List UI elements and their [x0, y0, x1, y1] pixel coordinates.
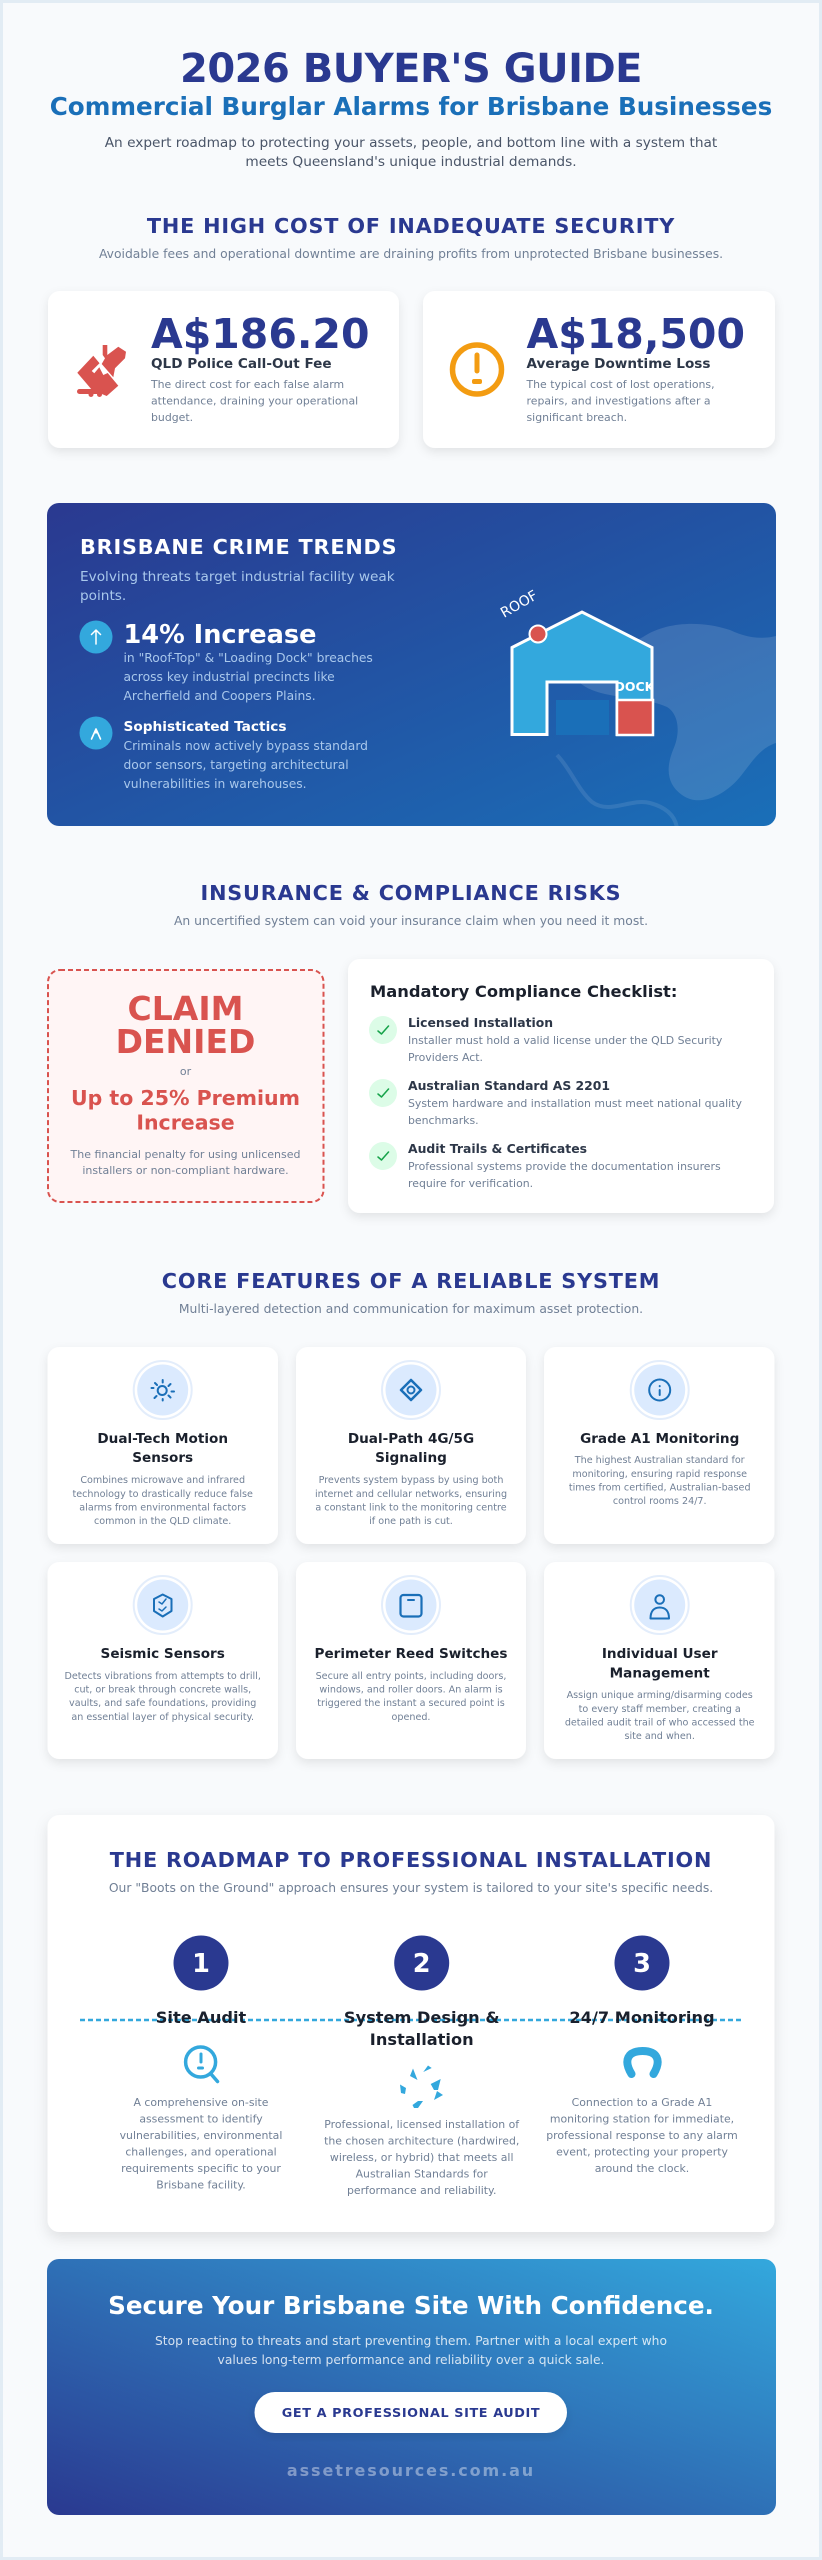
checklist item 1: Providers Act.: [408, 1051, 483, 1064]
feature card: reed switches: windows, and roller doors. An alarm is: [319, 1684, 503, 1696]
checklist item 2: Australian Standard AS 2201: [408, 1078, 610, 1093]
feature card: dual path: [296, 1347, 526, 1544]
feature card: user management: detailed audit trail of who accessed the: [565, 1718, 755, 1728]
roadmap heading: THE ROADMAP TO PROFESSIONAL INSTALLATION: [110, 1848, 712, 1872]
step 2: Australian Standards for: [356, 2168, 488, 2180]
feature card: user management: to every staff member, creating a: [579, 1704, 741, 1715]
icon: tactics: [80, 716, 112, 750]
stat: A$186.20: [151, 310, 369, 358]
section heading: insurance: An uncertified system can void your insurance claim when you need it most.: [174, 914, 648, 928]
section heading: insurance: [174, 881, 648, 928]
section heading: high cost: [99, 214, 723, 261]
header: [50, 46, 772, 170]
panel: claim denied: installers or non-compliant hardware.: [82, 1164, 289, 1177]
step 3: 3: [633, 1949, 651, 1979]
checklist item 1: Licensed Installation: [408, 1015, 553, 1030]
step 3: event, protecting your property: [556, 2146, 728, 2158]
panel: police fee: attendance, draining your operational: [151, 394, 358, 408]
feature card: reed switches: triggered the instant a secured point is: [317, 1698, 505, 1709]
step 1: Brisbane facility.: [156, 2178, 246, 2192]
step 3: [546, 1936, 738, 2175]
roadmap heading: [109, 1848, 713, 1895]
section heading: high cost: THE HIGH COST OF INADEQUATE SECURITY: [147, 214, 675, 238]
feature card: motion sensors: technology to drastically reduce false: [72, 1489, 253, 1500]
panel: claim denied: CLAIM: [128, 989, 243, 1028]
feature card: grade A1: times from certified, Australian-based: [569, 1482, 751, 1494]
step 1: assessment to identify: [139, 2112, 263, 2126]
icon: police alarm: [77, 345, 126, 397]
intro text: meets Queensland's unique industrial demands.: [245, 154, 577, 170]
checklist item 2: [369, 1078, 742, 1127]
feature card: grade A1: The highest Australian standard for: [574, 1455, 745, 1466]
step 2: Installation: [370, 2030, 474, 2049]
panel: compliance checklist: Mandatory Compliance Checklist:: [370, 982, 677, 1001]
checklist item 2: benchmarks.: [408, 1114, 479, 1127]
roadmap heading: Our "Boots on the Ground" approach ensures your system is tailored to your site's specific needs.: [109, 1881, 713, 1895]
feature card: seismic: Detects vibrations from attempts to drill,: [64, 1671, 261, 1682]
icon: sun sensor: [134, 1361, 192, 1419]
panel: Brisbane crime trends: Evolving threats target industrial facility weak: [80, 569, 395, 585]
panel: downtime loss: repairs, and investigations after a: [526, 394, 711, 408]
feature card: motion sensors: common in the QLD climate.: [94, 1516, 231, 1527]
panel: Brisbane crime trends: [47, 503, 776, 828]
subtitle: Commercial Burglar Alarms for Brisbane Businesses: [50, 92, 772, 121]
text: sophisticated tactics: vulnerabilities in warehouses.: [124, 777, 307, 791]
feature card: dual path: Signaling: [375, 1450, 447, 1466]
stat: 14% increase: in "Roof-Top" & "Loading Dock" breaches: [124, 651, 373, 665]
panel: police fee: budget.: [151, 411, 193, 424]
feature card: seismic: vaults, and safe foundations, providing: [69, 1698, 256, 1709]
panel: compliance checklist: [348, 959, 774, 1213]
button: GET A PROFESSIONAL SITE AUDIT: [282, 2406, 540, 2421]
icon: info: [631, 1361, 689, 1419]
step 2: the chosen architecture (hardwired,: [324, 2134, 519, 2148]
checklist item 3: Audit Trails & Certificates: [408, 1141, 587, 1156]
step 2: Professional, licensed installation of: [324, 2118, 520, 2131]
stat: 14% increase: Archerfield and Coopers Plains.: [124, 689, 316, 703]
step 1: challenges, and operational: [125, 2146, 277, 2158]
checklist item 2: System hardware and installation must meet national quality: [408, 1097, 742, 1110]
step 2: wireless, or hybrid) that meets all: [330, 2151, 513, 2164]
checklist item 3: require for verification.: [408, 1177, 533, 1190]
step 2: performance and reliability.: [347, 2184, 496, 2197]
panel: downtime loss: [423, 291, 775, 448]
feature card: dual path: Dual-Path 4G/5G: [348, 1431, 474, 1447]
feature card: motion sensors: [48, 1347, 278, 1544]
feature card: dual path: Prevents system bypass by using both: [319, 1475, 503, 1486]
feature card: reed switches: opened.: [392, 1712, 430, 1723]
feature card: reed switches: Perimeter Reed Switches: [314, 1646, 508, 1662]
step 1: vulnerabilities, environmental: [120, 2129, 282, 2142]
feature card: motion sensors: Dual-Tech Motion: [97, 1431, 228, 1447]
step 2: 2: [413, 1949, 431, 1979]
text: sophisticated tactics: Criminals now actively bypass standard: [124, 739, 368, 753]
button: [254, 2392, 567, 2433]
icon: door panel: [382, 1576, 440, 1634]
step 1: Site Audit: [156, 2008, 246, 2027]
feature card: seismic: Seismic Sensors: [101, 1646, 225, 1662]
text: sophisticated tactics: door sensors, targeting architectural: [124, 758, 349, 772]
text: sophisticated tactics: Sophisticated Tactics: [124, 719, 287, 735]
section heading: core features: [162, 1269, 660, 1316]
step 2: [324, 1936, 520, 2197]
icon: fragmented gear: [400, 2066, 443, 2108]
feature card: user management: Individual User: [602, 1646, 718, 1662]
panel: claim denied: or: [180, 1065, 192, 1078]
icon: warning circle: [452, 345, 502, 394]
panel: claim denied: [48, 970, 324, 1202]
panel: Brisbane crime trends: points.: [80, 588, 126, 604]
icon: diamond: [382, 1361, 440, 1419]
stat: 14% increase: [124, 620, 373, 703]
section heading: core features: CORE FEATURES OF A RELIABLE SYSTEM: [162, 1269, 660, 1293]
section heading: core features: Multi-layered detection and communication for maximum asset protection.: [179, 1302, 643, 1316]
feature card: dual path: a constant link to the monitoring centre: [315, 1502, 507, 1514]
feature card: motion sensors: Sensors: [132, 1450, 193, 1466]
panel: downtime loss: Average Downtime Loss: [526, 356, 710, 372]
feature card: reed switches: [296, 1562, 526, 1759]
step 3: 24/7 Monitoring: [569, 2008, 715, 2027]
step 2: System Design &: [344, 2008, 499, 2027]
feature card: motion sensors: Combines microwave and infrared: [80, 1475, 245, 1486]
intro text: [105, 135, 718, 170]
feature card: grade A1: monitoring, ensuring rapid response: [572, 1469, 747, 1480]
panel: downtime loss: The typical cost of lost operations,: [526, 378, 715, 391]
warehouse diagram: [498, 588, 656, 735]
feature card: user management: [544, 1562, 774, 1759]
dashed connector: [80, 2019, 742, 2021]
intro text: An expert roadmap to protecting your assets, people, and bottom line with a system that: [105, 135, 718, 151]
step 1: [120, 1936, 282, 2192]
icon: hex shield: [134, 1576, 192, 1634]
feature card: grade A1: [544, 1347, 774, 1544]
stat: A$18,500: [526, 310, 745, 358]
feature card: seismic: [48, 1562, 278, 1759]
checklist item 1: Installer must hold a valid license under the QLD Security: [408, 1034, 723, 1047]
feature card: user management: site and when.: [624, 1731, 695, 1742]
feature card: user management: Assign unique arming/disarming codes: [567, 1690, 753, 1701]
decorative map: [557, 624, 776, 828]
panel: police fee: QLD Police Call-Out Fee: [151, 356, 332, 372]
icon: user: [631, 1576, 689, 1634]
feature card: reed switches: Secure all entry points, including doors,: [316, 1671, 506, 1682]
panel: roadmap: [48, 1815, 774, 2232]
checklist item 3: Professional systems provide the documentation insurers: [408, 1160, 721, 1173]
website: assetresources.com.au: [287, 2461, 535, 2480]
panel: police fee: [48, 291, 399, 448]
panel: claim denied: Up to 25% Premium: [71, 1086, 300, 1110]
panel: claim denied: Increase: [136, 1110, 235, 1134]
feature card: seismic: an essential layer of physical security.: [71, 1712, 254, 1723]
panel: police fee: The direct cost for each false alarm: [150, 378, 344, 391]
step 1: 1: [192, 1949, 210, 1979]
feature card: motion sensors: alarms from environmental factors: [79, 1502, 246, 1514]
icon: up arrow: [80, 620, 112, 654]
section heading: insurance: INSURANCE & COMPLIANCE RISKS: [201, 881, 621, 905]
panel: call to action: Stop reacting to threats and start preventing them. Partner with a local expert who: [155, 2334, 667, 2348]
feature card: dual path: internet and cellular networks, ensuring: [315, 1489, 507, 1500]
feature card: grade A1: control rooms 24/7.: [613, 1496, 707, 1507]
panel: claim denied: DENIED: [116, 1022, 255, 1061]
panel: call to action: [47, 2259, 776, 2515]
icon: headset arch: [627, 2051, 658, 2074]
panel: claim denied: The financial penalty for using unlicensed: [70, 1148, 300, 1161]
section heading: high cost: Avoidable fees and operational downtime are draining profits from unprotected Brisbane businesses.: [99, 247, 723, 261]
step 3: Connection to a Grade A1: [572, 2096, 712, 2109]
panel: call to action: values long-term performance and reliability over a quick sale.: [218, 2353, 604, 2367]
feature card: dual path: if one path is cut.: [369, 1516, 453, 1527]
panel: downtime loss: significant breach.: [526, 411, 627, 424]
step 3: monitoring station for immediate,: [550, 2112, 734, 2126]
feature card: seismic: cut, or break through concrete walls,: [74, 1684, 251, 1696]
icon: audit magnifier: [186, 2047, 218, 2082]
warehouse diagram: ROOF: [498, 588, 540, 621]
title: 2026 BUYER'S GUIDE: [180, 46, 642, 92]
step 3: professional response to any alarm: [546, 2129, 738, 2142]
feature card: grade A1: Grade A1 Monitoring: [580, 1431, 739, 1447]
heading: BRISBANE CRIME TRENDS: [80, 535, 397, 559]
stat: 14% increase: 14% Increase: [124, 620, 316, 650]
step 3: around the clock.: [595, 2162, 689, 2175]
feature card: user management: Management: [610, 1666, 710, 1682]
panel: call to action: Secure Your Brisbane Site With Confidence.: [108, 2291, 714, 2320]
stat: 14% increase: across key industrial precincts like: [124, 670, 335, 684]
step 1: requirements specific to your: [121, 2162, 281, 2175]
warehouse diagram: DOCK: [614, 679, 656, 694]
checklist item 1: [369, 1015, 723, 1064]
text: sophisticated tactics: [124, 719, 368, 791]
step 1: A comprehensive on-site: [133, 2096, 269, 2109]
checklist item 3: [369, 1141, 721, 1190]
